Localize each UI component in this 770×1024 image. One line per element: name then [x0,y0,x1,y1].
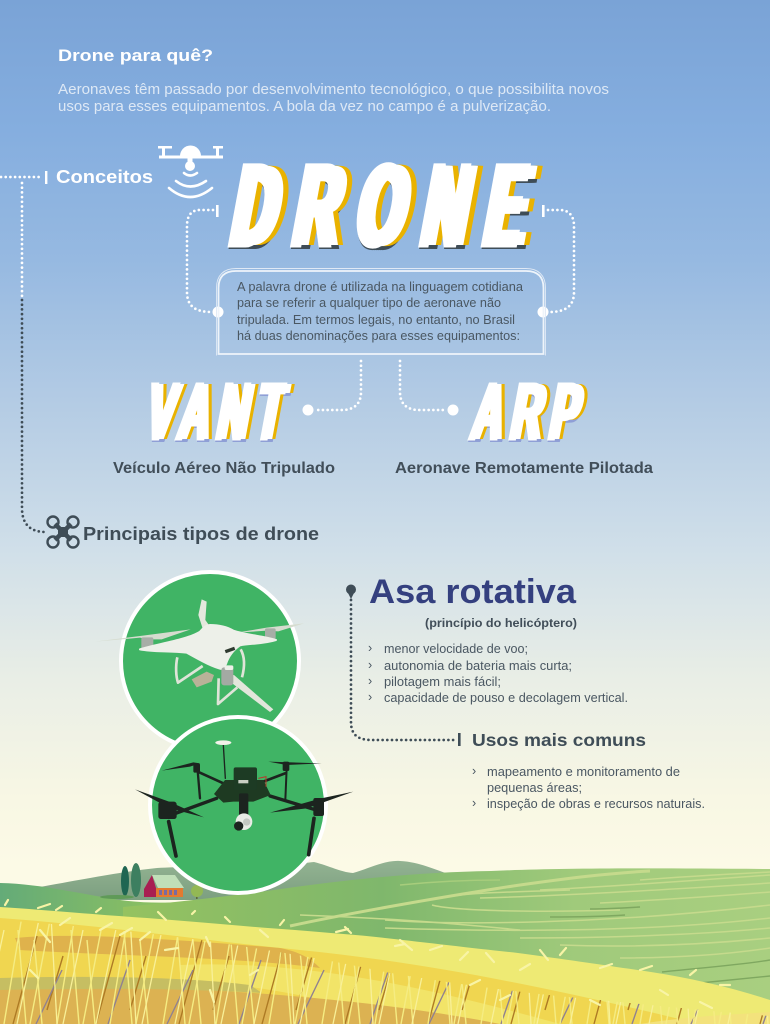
wheat grains [5,900,730,1008]
label: VANT meaning: Veículo Aéreo Não Tripulado [113,460,335,477]
small tree [191,885,203,899]
definition box: há duas denominações para esses equipamentos: [237,329,520,343]
list: usos [472,764,705,811]
list: asa rotativa features [368,641,628,705]
list: asa rotativa features: › [368,641,372,655]
trees [100,863,141,899]
barn [144,875,184,897]
definition box [216,268,546,356]
icon: quadcopter [48,516,78,548]
list: usos: inspeção de obras e recursos naturais. [487,797,705,811]
list: asa rotativa features: autonomia de bateria mais curta; [384,659,572,673]
heading: conceitos: Conceitos [56,167,153,187]
definition box: para se referir a qualquer tipo de aeronave não [237,296,501,310]
subtitle: princípio do helicóptero: (princípio do helicóptero) [425,616,577,630]
label: ARP meaning: Aeronave Remotamente Pilotada [395,460,653,477]
connector: drone right [538,205,574,318]
photo: black quadcopter [135,717,353,893]
heading: usos mais comuns: Usos mais comuns [472,730,646,750]
list: asa rotativa features: pilotagem mais fácil; [384,675,501,689]
intro text: usos para esses equipamentos. A bola da vez no campo é a pulverização. [58,99,551,115]
icon: drone with signal [158,146,223,197]
list: asa rotativa features: capacidade de pouso e decolagem vertical. [384,691,628,705]
heading: principais tipos: Principais tipos de drone [83,524,319,544]
main green field [123,868,770,1010]
list: asa rotativa features: › [368,690,372,704]
connector: conceitos to principais tipos [1,171,47,532]
connector: ARP [400,361,458,416]
left green field [0,883,300,960]
photo: white quadcopter [95,572,304,750]
wordmark: VANT: VANT [138,367,298,456]
list: asa rotativa features: › [368,658,372,672]
list: usos: mapeamento e monitoramento de [487,765,680,779]
landscape [0,861,770,1024]
connector: VANT [302,361,361,416]
list: asa rotativa features: › [368,674,372,688]
field furrows [290,871,770,958]
connector: drone left [187,205,224,318]
definition box: tripulada. Em termos legais, no entanto, no Brasil [237,313,515,327]
intro text: Aeronaves têm passado por desenvolvimento tecnológico, o que possibilita novos [58,82,609,98]
distant mountains [34,861,470,900]
list: usos: › [472,796,476,810]
wordmark: ARP: ARP [464,367,595,456]
list: usos: pequenas áreas; [487,781,582,795]
wordmark: DRONE: DRONE [221,142,556,270]
list: asa rotativa features: menor velocidade de voo; [384,642,528,656]
intro text [58,82,609,115]
wheat field [0,900,770,1024]
heading: asa rotativa: Asa rotativa [369,573,577,611]
list: usos: › [472,764,476,778]
title: Drone para quê? [58,46,213,65]
definition box: A palavra drone é utilizada na linguagem cotidiana [237,280,523,294]
connector: asa rotativa [346,584,461,746]
